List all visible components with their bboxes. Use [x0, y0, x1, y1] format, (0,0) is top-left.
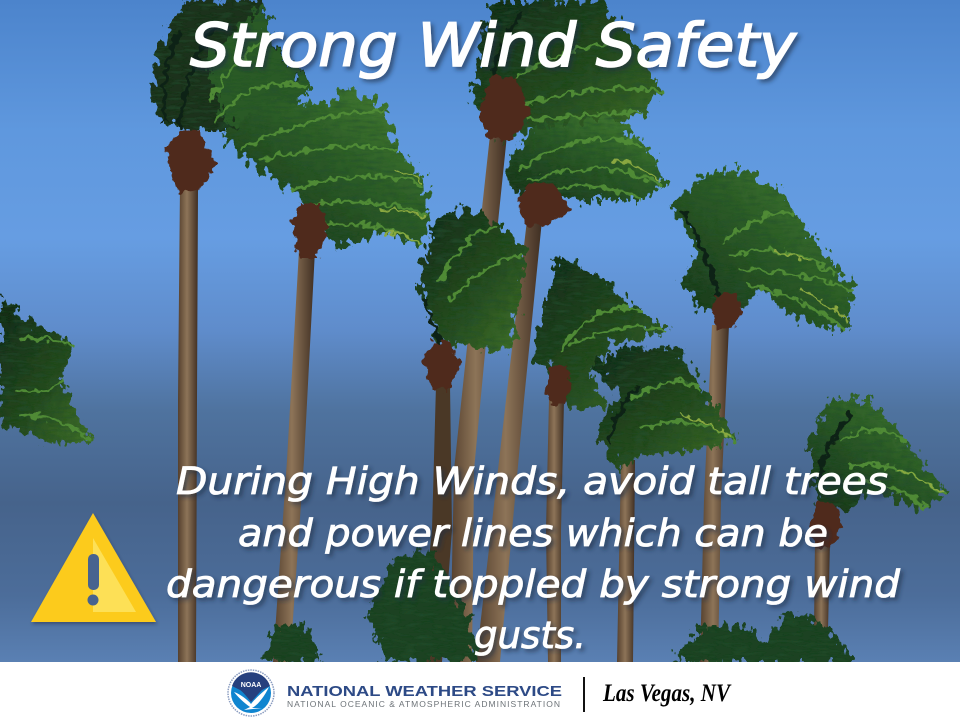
crown: palm 6: [590, 347, 738, 468]
footer band: [0, 662, 960, 720]
bole: palm 5: [546, 365, 572, 405]
palm boles: [165, 75, 842, 548]
crown: palm 1 right fronds: [205, 5, 312, 125]
bole: palm 1: [165, 128, 215, 193]
fronds: yellow-green tips: [380, 160, 942, 492]
bole: palm 3: [478, 75, 532, 140]
crown: palm 4: [507, 115, 665, 200]
trunk: palm 2: [273, 250, 315, 662]
office location: Las Vegas, NV: [602, 680, 732, 707]
crown: far left palm: [0, 300, 92, 443]
bole: palm behind centre: [423, 340, 460, 390]
crown: palm 2: [222, 88, 428, 248]
message line 2: and power lines which can be: [238, 512, 828, 555]
fronds: dark ribs: [164, 15, 850, 480]
trunk: palm 5: [546, 400, 564, 662]
crown: palm 7: [670, 167, 853, 333]
crown: palm 5: [532, 258, 668, 410]
trunk: palm 6: [617, 460, 635, 662]
trunk: palm behind centre: [418, 385, 452, 662]
title: Strong Wind Safety: [190, 11, 798, 81]
bole: palm 7: [712, 292, 742, 330]
crown: palm behind centre: [417, 208, 525, 350]
message line 3: dangerous if toppled by strong wind: [166, 563, 901, 606]
crown: palm 8: [807, 400, 948, 510]
bole: palm 8: [810, 502, 842, 548]
crown: palm 3 top: [472, 0, 662, 140]
bole: palm 2: [292, 203, 328, 258]
crown: palm 1: [152, 0, 310, 130]
safety message: [166, 460, 901, 657]
icon: warning triangle: [31, 513, 156, 622]
icon: NOAA logo: NOAA: [241, 682, 261, 689]
frond highlights: [15, 15, 945, 508]
message line 4: gusts.: [474, 614, 586, 657]
icon: NOAA logo: [228, 670, 274, 716]
trunk: palm 8: [814, 540, 830, 630]
trunk: tall centre palm: [450, 135, 507, 662]
bole: palm 4: [518, 182, 570, 228]
trunk: palm 7: [700, 325, 729, 662]
fronds: mid green: [15, 40, 945, 508]
parent agency name: NATIONAL OCEANIC & ATMOSPHERIC ADMINISTRATION: [287, 699, 560, 709]
trunk: palm 4: [476, 220, 542, 662]
agency name: NATIONAL WEATHER SERVICE: [287, 683, 562, 700]
trunk: palm 1: [178, 185, 198, 662]
crown: small bottom palms: [260, 548, 855, 662]
National Weather Service wordmark: [287, 683, 562, 709]
message line 1: During High Winds, avoid tall trees: [176, 460, 888, 503]
